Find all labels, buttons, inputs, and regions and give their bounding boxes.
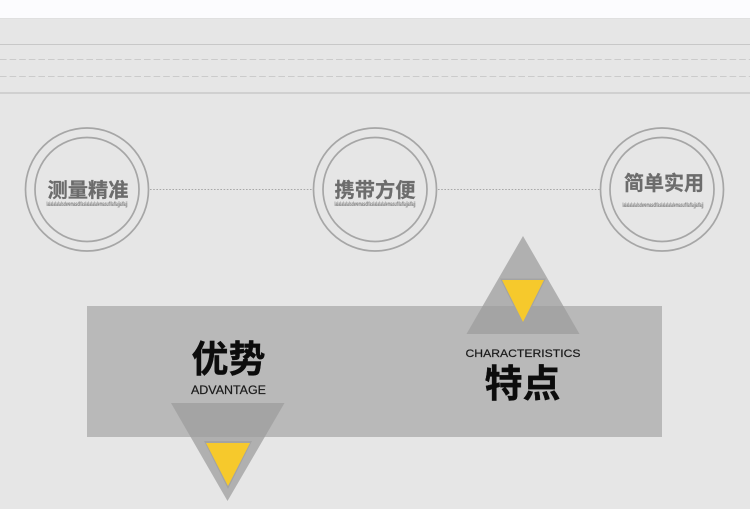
icon: downward triangle with yellow centre bbox=[171, 403, 284, 501]
heading: 优势: 优势 bbox=[192, 339, 266, 380]
panel: grey band bbox=[87, 306, 662, 437]
caption: tiny text: lalalalalalsdwemasdlfaslalalalalemasuf/laflajjalfajj bbox=[46, 202, 128, 208]
icon: upward triangle with yellow centre bbox=[466, 236, 580, 334]
heading: 测量精准: 测量精准 bbox=[48, 179, 128, 202]
feature circle: 测量精准 bbox=[26, 128, 148, 251]
top white band bbox=[0, 0, 750, 18]
label: ADVANTAGE: ADVANTAGE bbox=[191, 385, 266, 397]
heading: 简单实用: 简单实用 bbox=[624, 171, 704, 195]
label: CHARACTERISTICS: CHARACTERISTICS bbox=[466, 348, 580, 360]
caption: tiny text: lalalalalalsdwemasdlfaslalalalalemasuf/laflajjalfajj bbox=[334, 202, 416, 208]
heading: 携带方便: 携带方便 bbox=[334, 178, 416, 202]
feature circle: 简单实用 bbox=[600, 128, 724, 251]
feature circle: 携带方便 bbox=[314, 128, 436, 251]
heading: 特点: 特点 bbox=[484, 364, 561, 406]
